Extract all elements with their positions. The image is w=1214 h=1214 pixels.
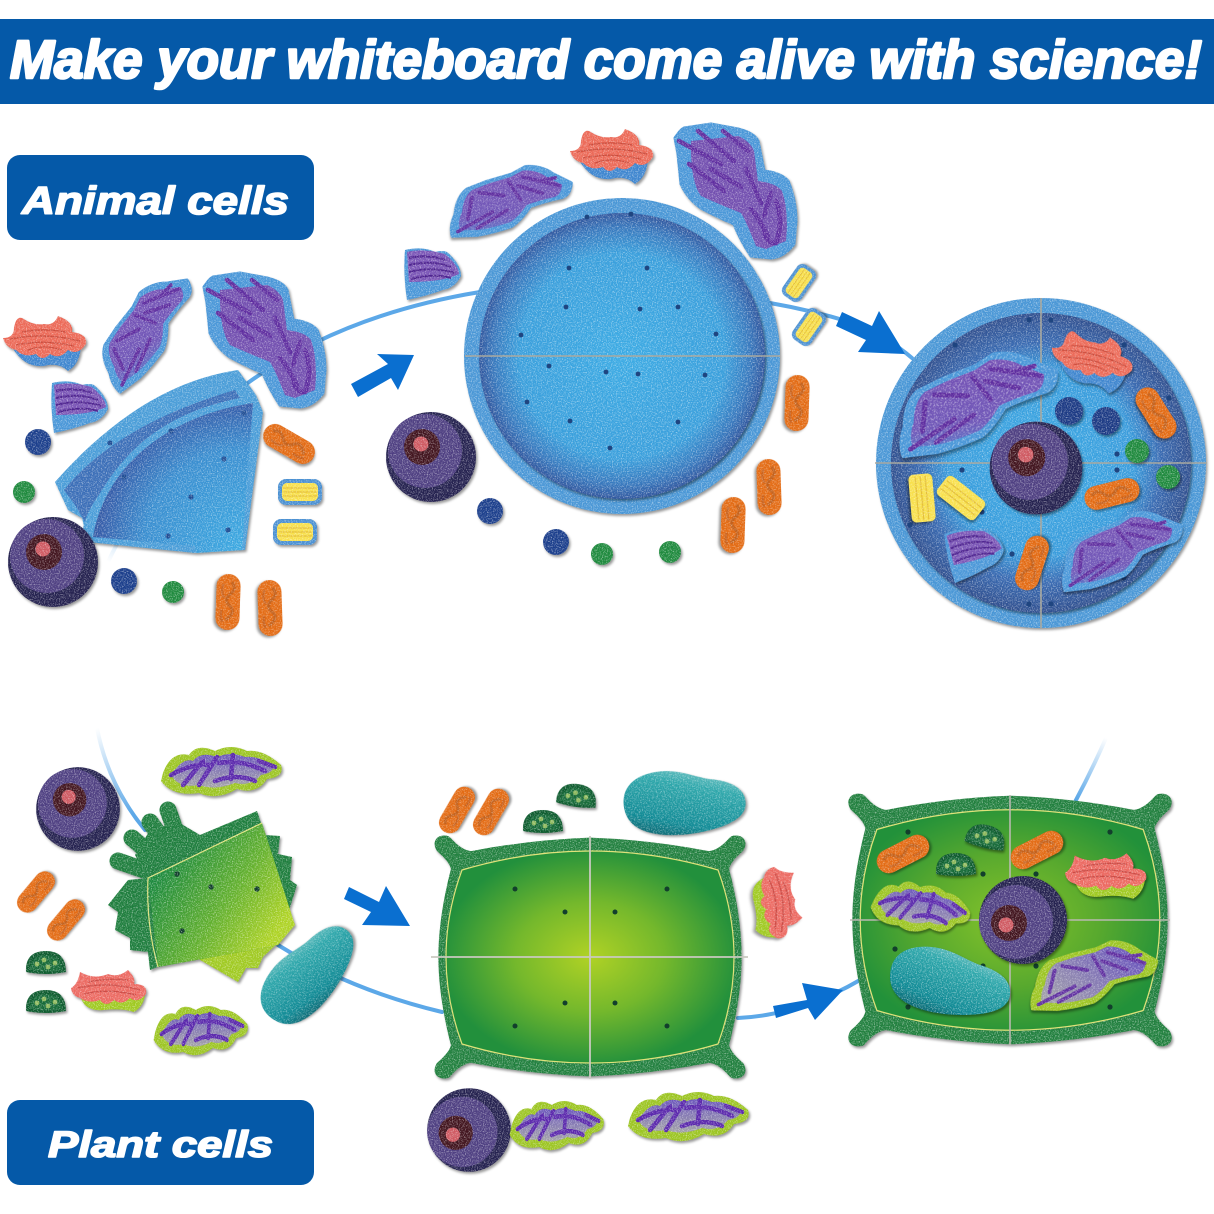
mitochondria (259, 420, 319, 468)
lysosomes (278, 479, 322, 505)
chloroplasts (26, 951, 66, 974)
animal step 2: felt pieces (386, 124, 829, 565)
ER bottom (154, 1006, 248, 1055)
label: plant cells: Plant cells (48, 1124, 273, 1165)
nucleus (990, 422, 1082, 514)
nucleus (427, 1088, 511, 1172)
vacuole (250, 907, 364, 1039)
vacuole (618, 755, 750, 847)
small ER (943, 523, 1008, 584)
chloroplasts (964, 821, 1008, 853)
ribosomes (13, 429, 184, 603)
golgi (1065, 853, 1146, 899)
ER lower right (1051, 483, 1184, 626)
vacuole (890, 947, 1010, 1015)
ER A (104, 280, 190, 392)
golgi (3, 316, 86, 371)
animal step 2: base circle (464, 198, 780, 514)
ER right (1019, 909, 1159, 1053)
golgi (747, 864, 805, 942)
label: animal cells (7, 155, 314, 240)
mitochondria (435, 783, 479, 837)
animal step 1: felt pieces (3, 273, 325, 636)
plant step 2: base cell (431, 836, 748, 1079)
small ER (404, 248, 461, 300)
nucleus (979, 876, 1067, 964)
lysosomes (779, 261, 819, 305)
stacked plant cell wedges (108, 810, 297, 982)
ER (628, 1092, 749, 1141)
small ER (51, 381, 108, 433)
label: plant cells (7, 1100, 314, 1185)
plant step 2: felt pieces (427, 755, 805, 1172)
nucleus (8, 517, 98, 607)
arrow: plant step 1 to 2 (344, 886, 410, 926)
ribosomes (1055, 397, 1180, 489)
ER top (161, 747, 282, 796)
title banner: Make your whiteboard come alive with science! (10, 30, 1202, 90)
mitochondria (873, 831, 933, 877)
label: animal cells: Animal cells (21, 180, 289, 223)
ER B (675, 124, 796, 258)
mitochondria (784, 375, 810, 431)
golgi (71, 970, 146, 1012)
nucleus (36, 767, 120, 851)
connector curves (97, 292, 1106, 1018)
mitochondria (13, 867, 59, 917)
ER (510, 1101, 604, 1150)
stacked animal cell wedges (55, 370, 263, 553)
golgi (570, 129, 653, 184)
plant step 1: felt pieces (13, 747, 364, 1055)
ER large (885, 315, 1060, 503)
ER A (439, 135, 574, 277)
golgi (1045, 326, 1138, 397)
arrow: animal step 2 to 3 (836, 311, 905, 354)
plant step 3: assembled cell (850, 795, 1170, 1053)
ER left (867, 874, 975, 943)
lysosomes (908, 473, 936, 523)
ribosomes (477, 498, 681, 565)
nucleus (386, 412, 476, 502)
arrow: plant step 2 to 3 (773, 983, 843, 1020)
arrow: animal step 1 to 2 (351, 354, 414, 397)
animal step 3: assembled cell (875, 298, 1207, 628)
ER B (204, 273, 325, 407)
mitochondria (1131, 383, 1181, 443)
chloroplasts (556, 781, 598, 810)
